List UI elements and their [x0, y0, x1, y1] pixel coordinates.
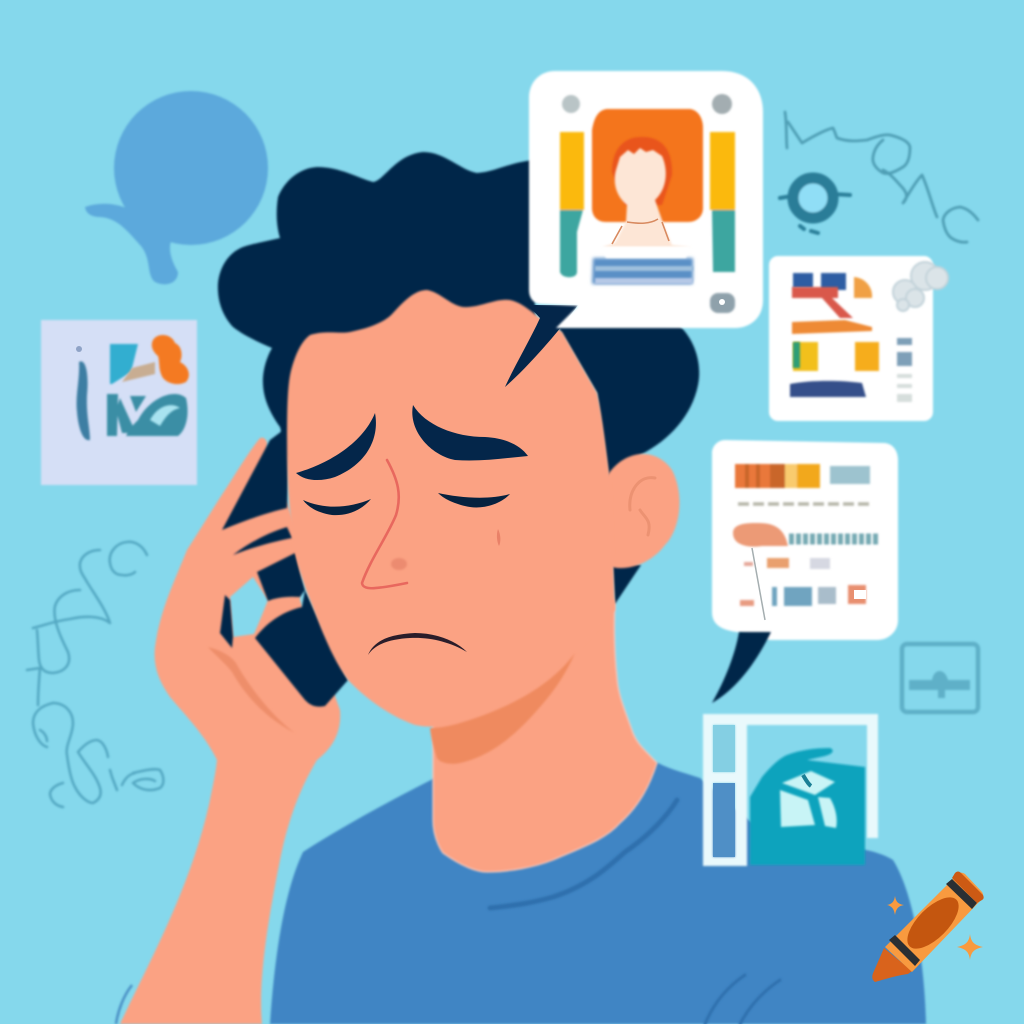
jaw shadow: [430, 653, 575, 764]
hair right side: [555, 322, 699, 490]
left pane bottom: [713, 783, 735, 857]
icon: faint image frame: [902, 644, 978, 712]
panel: portrait speech card: [529, 71, 763, 328]
left eyebrow: [296, 413, 376, 480]
stem: [752, 548, 765, 620]
speech tail: [712, 632, 771, 703]
finger shadow wedge: [233, 527, 292, 555]
row 3: [772, 587, 812, 606]
hair lock over forehead: [505, 305, 578, 387]
icon: gear ring: [780, 178, 850, 233]
mini columns: [830, 466, 870, 484]
gap between fingers: [230, 577, 268, 637]
left pane top: [713, 725, 735, 772]
teal document: [750, 748, 865, 865]
palm crease: [208, 647, 295, 733]
left eye: [303, 499, 371, 515]
face features: [296, 405, 528, 655]
crayon bottom band: [889, 935, 920, 966]
panel: document speech card: [712, 440, 898, 703]
crayon oval: [899, 889, 967, 957]
right bar: [710, 132, 735, 272]
orange bar strip: [735, 464, 820, 488]
face: [287, 290, 615, 727]
right eyebrow: [412, 405, 528, 461]
finger wedge: [220, 595, 233, 648]
neck: [433, 600, 657, 872]
crayon top band: [946, 879, 977, 909]
orange glyph: [733, 523, 788, 547]
sparkle small: [887, 896, 904, 915]
scribble: lettering top right: [785, 112, 978, 242]
crayon tip: [872, 948, 912, 982]
left bar: [560, 132, 584, 277]
scribbled handwriting left: [27, 542, 163, 807]
icon: blue balloon blob: [85, 91, 268, 284]
shirt collar and folds: [490, 800, 780, 1024]
mouth: [368, 633, 467, 655]
orange block: [855, 342, 879, 371]
panel: top-right chart card: [769, 256, 948, 421]
portrait shirt: [592, 258, 693, 284]
shirt: [270, 763, 926, 1024]
portrait face: [602, 148, 692, 247]
hair below ear: [612, 560, 641, 604]
cheek mark: [497, 529, 500, 546]
nose: [362, 460, 407, 588]
portrait hair: [612, 137, 672, 205]
hair and phone between fingers: [222, 425, 290, 530]
panel: left logo card: [41, 320, 197, 485]
crayon body: [885, 873, 983, 972]
row 2: [767, 558, 789, 568]
logo mark waves: [107, 394, 188, 436]
crayon cap: [952, 872, 984, 903]
phone: [255, 553, 348, 707]
logo mark blue shape: [110, 344, 138, 384]
envelope icon: [780, 771, 837, 828]
orange bar: [792, 320, 872, 334]
right eye: [438, 493, 510, 507]
yellow-green block: [793, 342, 818, 371]
icon: crayon logo: [872, 872, 984, 982]
hair: [218, 140, 535, 500]
portrait orange background: [592, 109, 703, 222]
red shape: [792, 287, 853, 318]
cloud: [893, 262, 948, 311]
pin dots: [562, 95, 580, 113]
hand and arm: [120, 438, 340, 1024]
orange half circle: [854, 277, 872, 298]
small pseudo-text: [897, 338, 912, 366]
logo mark i: [77, 361, 90, 440]
shirt sliver behind arm: [116, 985, 132, 1024]
portrait neck lines: [612, 219, 669, 244]
logo mark orange shape: [152, 335, 189, 384]
teal text row: [789, 534, 878, 544]
navy bar: [790, 381, 866, 397]
nostril: [391, 558, 407, 570]
sparkle large: [957, 934, 983, 960]
panel: bottom window card: [703, 714, 878, 866]
ear: [605, 454, 679, 568]
blue blocks: [793, 273, 846, 290]
text rule: [738, 502, 872, 506]
